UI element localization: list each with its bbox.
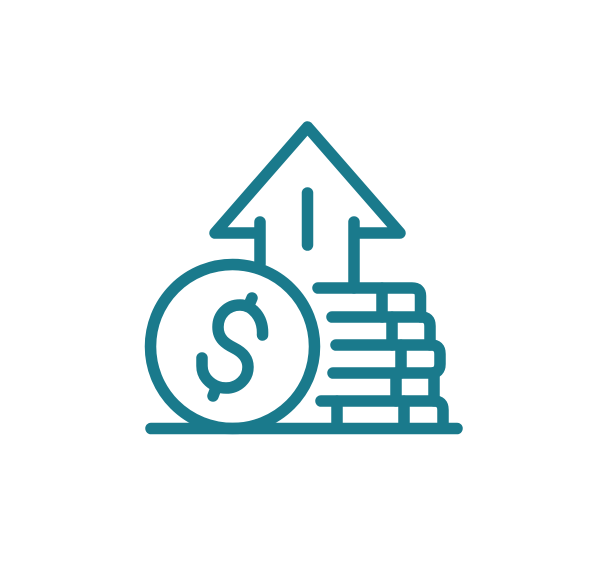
icon: up arrow <box>215 127 400 288</box>
icon: coin stack <box>318 288 443 428</box>
ground line <box>151 423 457 434</box>
icon: dollar coin <box>150 264 314 428</box>
